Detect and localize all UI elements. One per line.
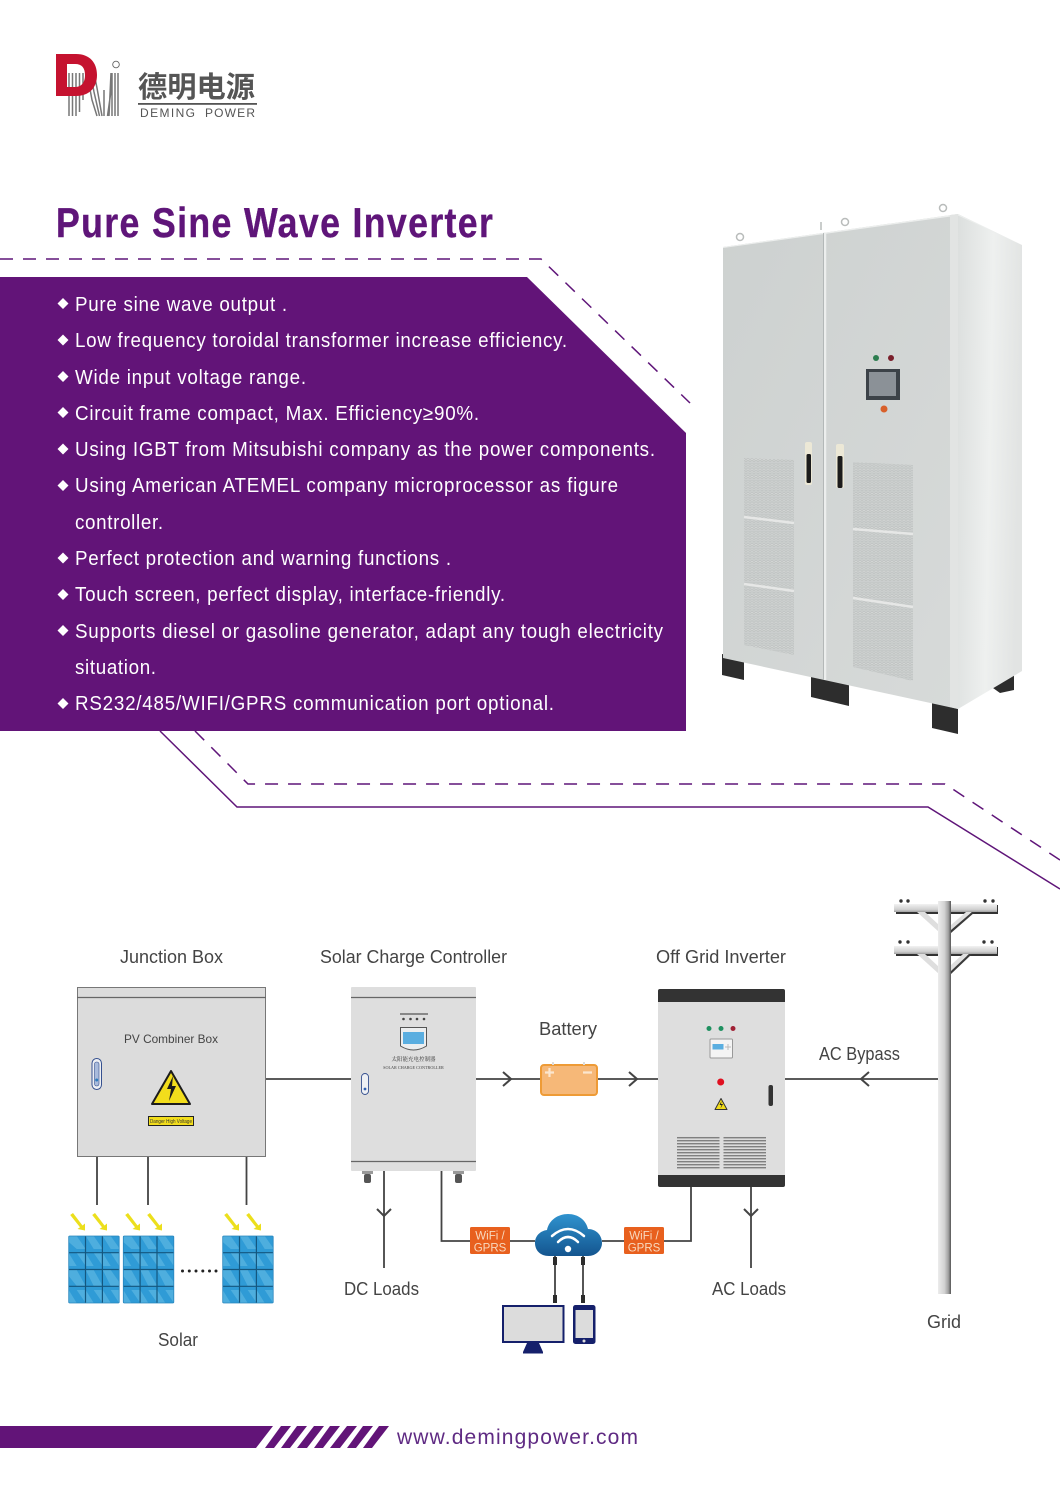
inverter handle xyxy=(768,1085,773,1106)
cabinet lifting rings xyxy=(736,204,946,240)
box lock xyxy=(92,1058,102,1090)
logo English name: DEMING xyxy=(140,106,195,120)
off grid inverter xyxy=(658,989,785,1187)
website: www.demingpower.com xyxy=(396,1426,638,1449)
cable glands xyxy=(362,1171,464,1183)
door edge strip xyxy=(950,214,958,709)
right vent xyxy=(853,462,913,681)
system diagram xyxy=(69,899,998,1354)
inverter cabinet photo xyxy=(722,204,1022,734)
cabinet top edge xyxy=(723,214,1022,248)
feature list: Using IGBT from Mitsubishi company as the power components. xyxy=(75,438,655,461)
heading: Battery: Battery xyxy=(539,1019,597,1039)
inverter stop button xyxy=(717,1078,724,1086)
feature list: Touch screen, perfect display, interface-friendly. xyxy=(75,583,505,606)
cabinet feet xyxy=(722,654,1014,734)
footer bar xyxy=(0,1426,638,1449)
heading: Grid: Grid xyxy=(927,1312,961,1332)
warning plate xyxy=(148,1116,194,1126)
door seam xyxy=(824,233,825,680)
inverter bottom band xyxy=(658,1175,785,1187)
feature list xyxy=(75,293,663,715)
feature list: controller. xyxy=(75,511,163,534)
title: Pure Sine Wave Inverter xyxy=(56,200,493,247)
panel 2 xyxy=(123,1236,174,1303)
controller Chinese label: 太阳能充电控制器 xyxy=(391,1055,436,1063)
solid line: lower frame xyxy=(160,731,1060,889)
sun rays xyxy=(70,1213,261,1230)
touch screen xyxy=(866,369,900,400)
inverter louvers xyxy=(677,1136,766,1169)
heading: AC Loads: AC Loads xyxy=(712,1279,786,1299)
inverter display xyxy=(710,1039,732,1058)
heading: Solar Charge Controller: Solar Charge Controller xyxy=(320,947,507,967)
wiring xyxy=(97,1079,938,1302)
heading: AC Bypass: AC Bypass xyxy=(819,1044,900,1064)
cloud WiFi icon xyxy=(535,1214,602,1256)
WiFi GPRS badge left: WiFi / xyxy=(475,1230,505,1242)
WiFi GPRS badge right xyxy=(624,1227,664,1254)
left vent xyxy=(744,458,794,655)
logo mark: DM monogram xyxy=(56,54,119,116)
logo Chinese name: 德明电源 xyxy=(138,64,255,106)
heading: Solar: Solar xyxy=(158,1330,198,1350)
feature list: Circuit frame compact, Max. Efficiency≥90%. xyxy=(75,402,479,425)
WiFi GPRS badge right: GPRS xyxy=(628,1242,661,1254)
logo: Deming Power xyxy=(56,54,257,120)
solar panels xyxy=(69,1213,273,1303)
heading: Junction Box: Junction Box xyxy=(120,947,223,967)
WiFi GPRS badge right: WiFi / xyxy=(629,1230,659,1242)
crossarm shadows xyxy=(896,905,998,956)
logo English name xyxy=(140,106,255,120)
logo English name: POWER xyxy=(205,106,255,120)
inverter warning icon xyxy=(715,1098,727,1110)
feature list: Low frequency toroidal transformer increase efficiency. xyxy=(75,329,567,352)
warning plate: Danger High Voltage xyxy=(150,1119,192,1125)
utility pole xyxy=(894,899,998,1294)
braces xyxy=(917,912,939,974)
inverter top band xyxy=(658,989,785,1002)
battery xyxy=(541,1062,597,1095)
pole shaft xyxy=(938,901,951,1294)
feature list: situation. xyxy=(75,656,156,679)
feature list: Perfect protection and warning functions . xyxy=(75,547,451,570)
status LEDs xyxy=(400,1013,428,1020)
feature list: Using American ATEMEL company microprocessor as figure xyxy=(75,474,618,497)
smartphone icon xyxy=(573,1305,596,1344)
controller display xyxy=(400,1028,426,1050)
cabinet front xyxy=(723,214,958,709)
panel 3 xyxy=(223,1236,273,1303)
feature bullets xyxy=(58,298,68,709)
panel: features xyxy=(0,277,686,731)
dashed line: upper frame xyxy=(0,259,690,403)
crossarms xyxy=(894,904,997,954)
feature list: Pure sine wave output . xyxy=(75,293,287,316)
warning triangle xyxy=(152,1071,190,1104)
controller lock xyxy=(362,1074,368,1094)
ellipsis dots xyxy=(181,1270,218,1272)
box label: PV Combiner Box xyxy=(124,1032,218,1046)
computer monitor icon xyxy=(503,1306,564,1354)
feature list: RS232/485/WIFI/GPRS communication port optional. xyxy=(75,692,554,715)
inverter LEDs xyxy=(706,1026,736,1031)
insulators xyxy=(898,899,995,944)
WiFi GPRS badge left xyxy=(470,1227,510,1254)
heading: DC Loads: DC Loads xyxy=(344,1279,419,1299)
WiFi GPRS badge left: GPRS xyxy=(474,1242,507,1254)
junction box xyxy=(77,988,266,1156)
feature list: Supports diesel or gasoline generator, adapt any tough electricity xyxy=(75,620,663,643)
solar charge controller xyxy=(351,987,476,1183)
flow arrows xyxy=(377,1072,869,1216)
stop button xyxy=(880,406,888,412)
feature list: Wide input voltage range. xyxy=(75,366,306,389)
logo rule xyxy=(138,103,257,105)
panel 1 xyxy=(69,1236,119,1303)
heading: Off Grid Inverter: Off Grid Inverter xyxy=(656,947,786,967)
indicator lights xyxy=(873,355,894,361)
cable connectors xyxy=(553,1257,585,1303)
dashed line: lower frame xyxy=(195,731,1060,860)
door handles xyxy=(805,442,844,488)
cabinet side xyxy=(958,214,1022,709)
footer stripes xyxy=(265,1426,389,1448)
controller English label: SOLAR CHARGE CONTROLLER xyxy=(383,1065,444,1070)
